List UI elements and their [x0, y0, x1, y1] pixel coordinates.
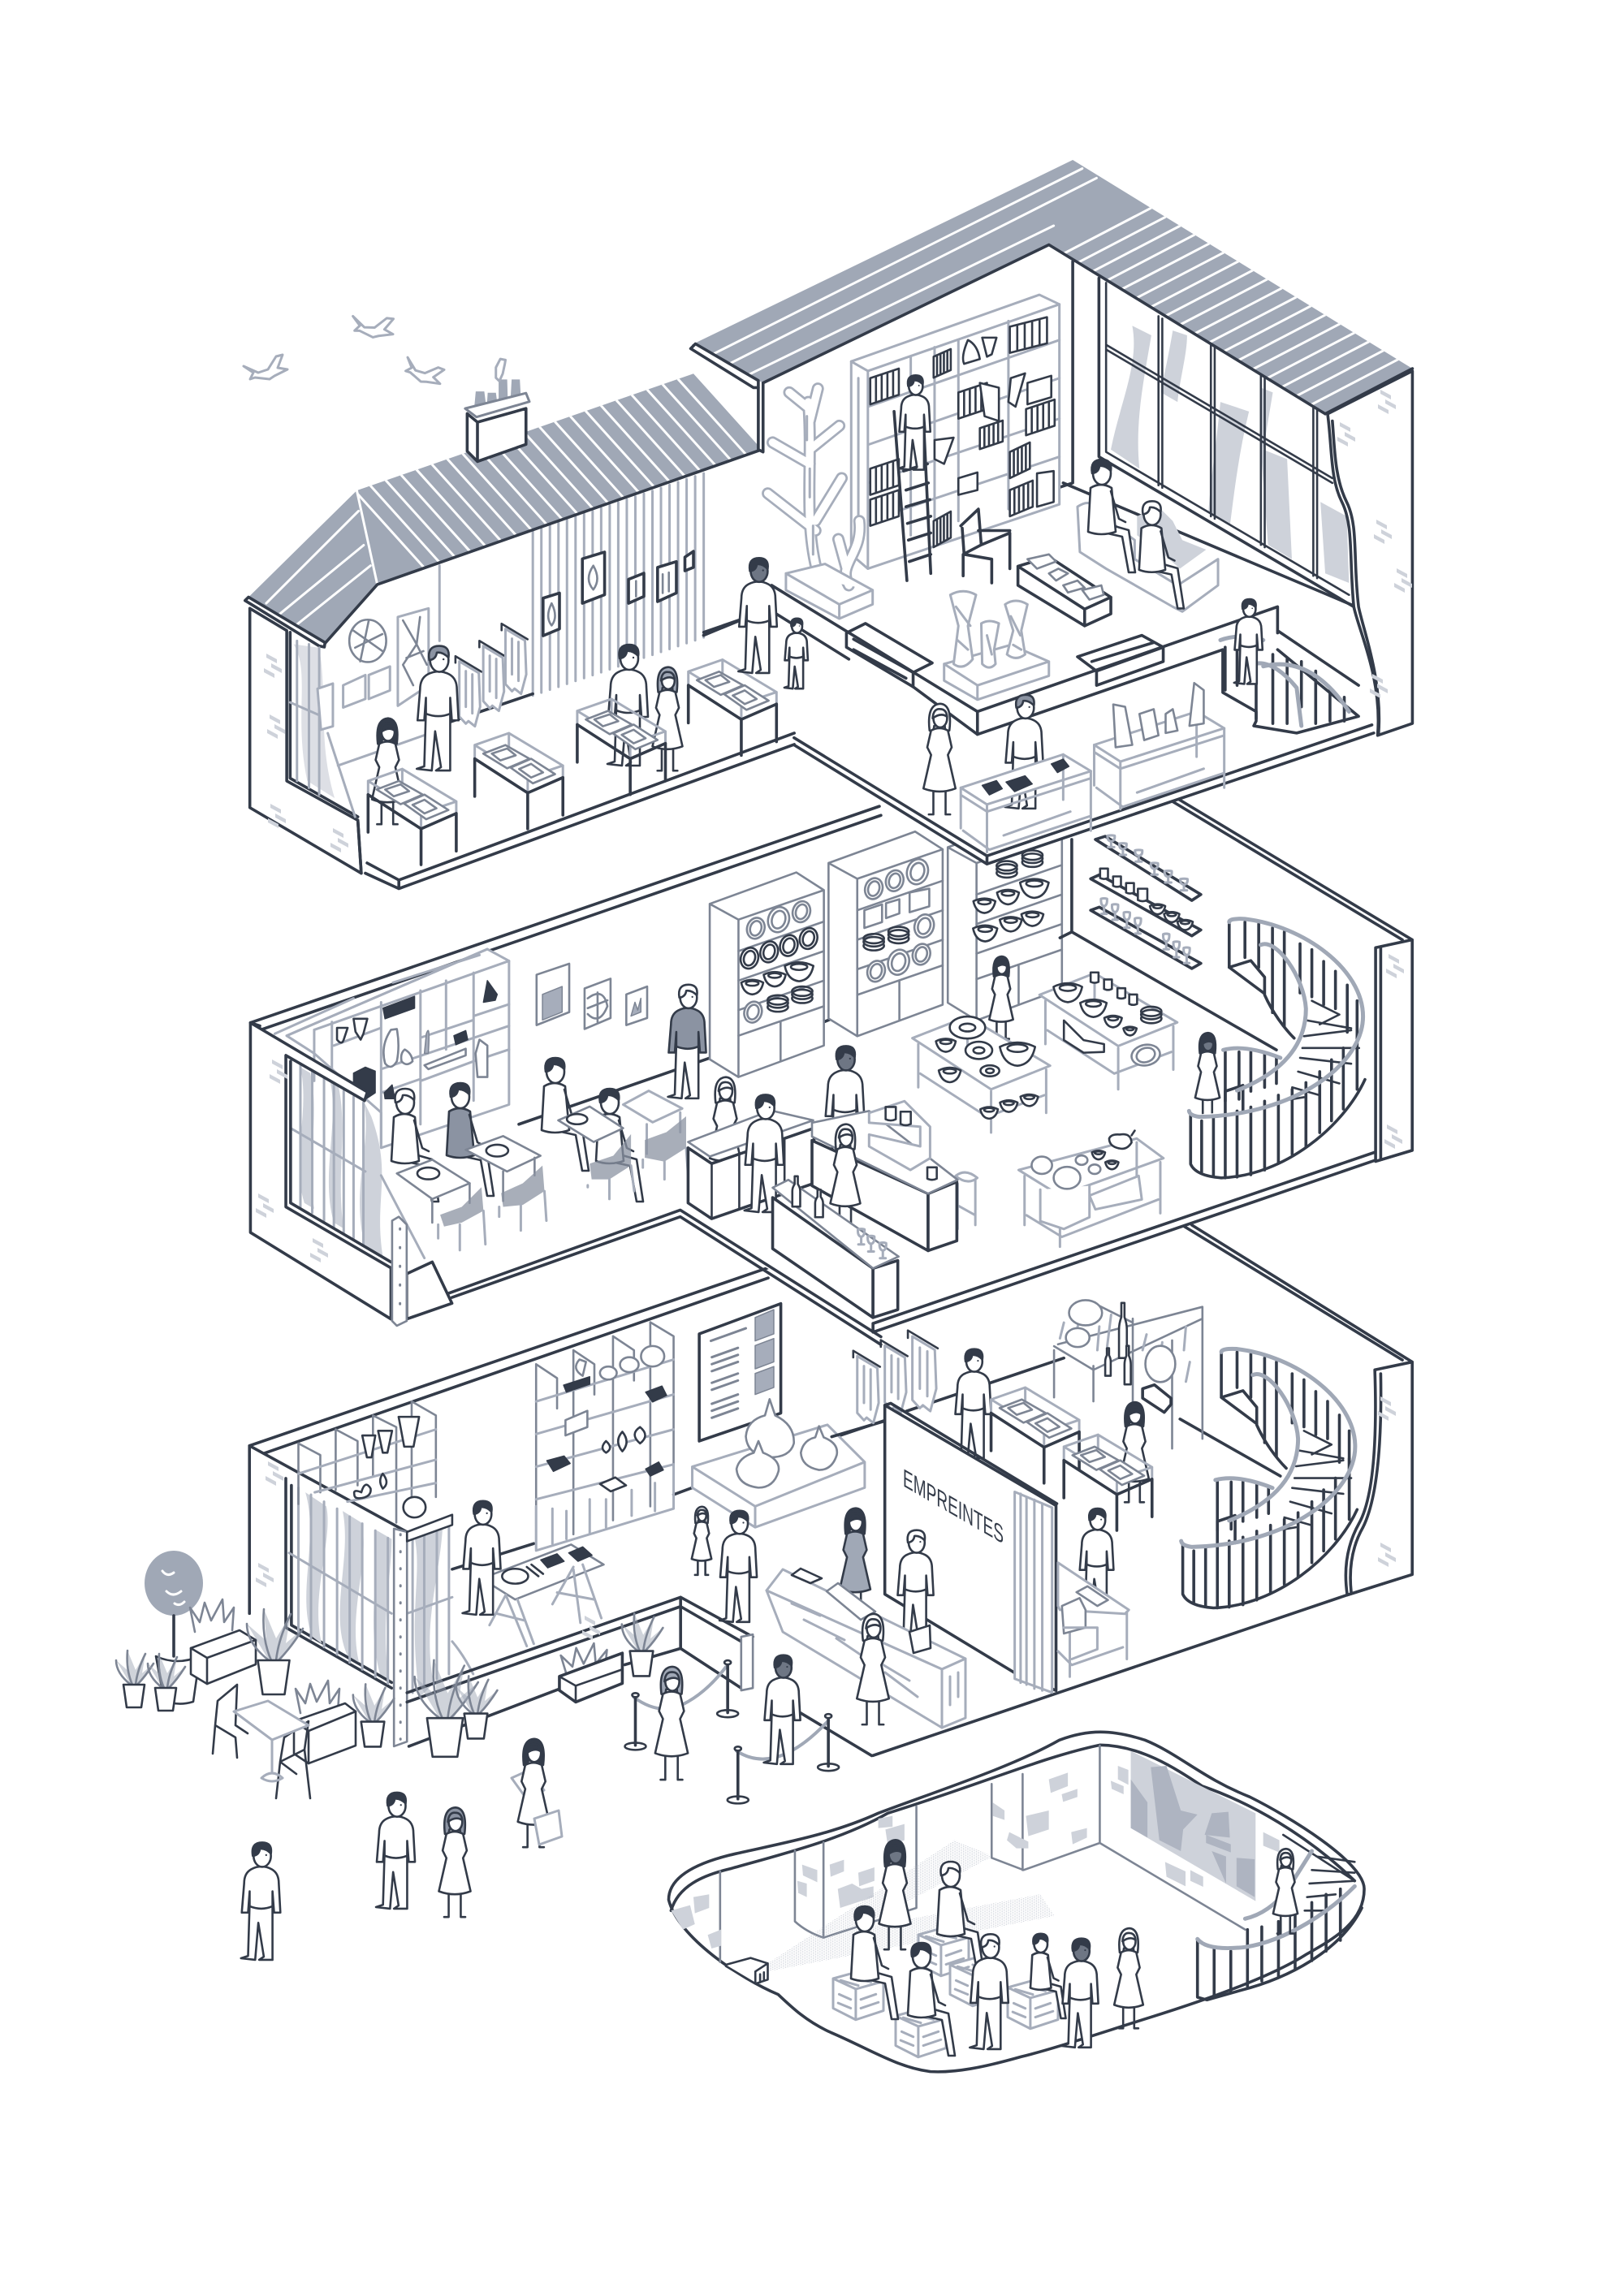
bird 3 — [400, 348, 448, 391]
console tables — [961, 683, 1224, 852]
stack — [767, 995, 788, 1012]
bowl — [741, 980, 763, 995]
pot plant large — [415, 1660, 478, 1757]
person: woman behind counter — [710, 1077, 741, 1183]
person: seated bearded man — [1088, 460, 1135, 572]
person: woman at till — [840, 1508, 870, 1614]
bricks — [1370, 674, 1388, 698]
rope barrier — [625, 1660, 839, 1803]
person: woman bending — [1120, 1402, 1149, 1502]
framed pictures — [543, 551, 693, 636]
spiral staircase — [1189, 919, 1365, 1178]
roof west — [246, 373, 762, 646]
planter 3 — [559, 1643, 622, 1702]
information poster — [699, 1304, 781, 1441]
ceramic tables — [913, 973, 1177, 1247]
person: queue woman grey hair — [655, 1667, 688, 1780]
pot plant — [353, 1684, 394, 1746]
person: salesman — [1005, 695, 1043, 809]
wooden display — [1054, 1300, 1203, 1448]
wire shelf left — [298, 1401, 436, 1522]
dining tables and chairs — [397, 1091, 688, 1250]
cafe shell — [250, 806, 881, 1344]
eave west — [245, 597, 325, 647]
panel: first floor cafe and ceramics — [250, 799, 1412, 1344]
plates — [777, 933, 801, 958]
person: shop assistant — [897, 1530, 934, 1639]
person: woman on stairs — [1273, 1849, 1298, 1934]
person: man on ladder — [899, 375, 931, 470]
floor edge east — [794, 725, 1374, 864]
person: woman with bag — [923, 704, 956, 814]
pot plant large — [247, 1609, 303, 1694]
bricks — [270, 1060, 287, 1084]
ground floor back shell — [249, 1267, 886, 1755]
terrace — [116, 1551, 839, 1803]
person: seated woman — [391, 1089, 438, 1202]
east wing library — [697, 261, 1358, 735]
bird 1 — [244, 355, 287, 379]
mid shell right — [873, 799, 1412, 1332]
art left — [317, 684, 333, 730]
low brick wall — [407, 1597, 753, 1746]
sculpture plinth — [944, 591, 1049, 700]
bricks — [1337, 422, 1355, 447]
person: seated boy — [1030, 1934, 1065, 2018]
pot plant — [148, 1654, 185, 1711]
towels — [456, 656, 482, 727]
cupboards right — [828, 816, 1062, 1036]
person: woman kneeling at table — [989, 956, 1013, 1039]
panel: ground floor shop — [116, 1225, 1412, 1960]
trestle table — [482, 1544, 603, 1599]
towels — [881, 1340, 908, 1413]
wall line — [1058, 261, 1356, 606]
person: woman on stairs — [1195, 1033, 1220, 1118]
person: woman grey hair walking — [438, 1807, 471, 1917]
bricks — [1394, 568, 1412, 593]
bricks — [1384, 1124, 1402, 1149]
person: bearded man — [1079, 1508, 1113, 1612]
floor plate first floor — [452, 1055, 1376, 1332]
plates — [758, 939, 780, 965]
person: seated woman — [937, 1862, 984, 1974]
plate — [741, 999, 765, 1025]
coffee table — [1018, 555, 1111, 626]
person: man walking — [719, 1511, 757, 1622]
person: seated woman long hair — [1139, 501, 1184, 608]
small art — [343, 667, 390, 707]
seating cube 3 — [918, 1927, 969, 1976]
tree sculpture — [768, 389, 873, 619]
shelves on wall — [1095, 836, 1201, 900]
bricks — [268, 804, 286, 828]
towels — [479, 641, 505, 711]
wall art — [537, 964, 569, 1025]
sales counter — [767, 1569, 965, 1728]
stair opening — [1220, 637, 1358, 733]
towels — [502, 624, 528, 694]
pot plant — [622, 1613, 663, 1676]
projected light beams — [764, 1841, 1055, 1971]
bricks — [330, 828, 348, 852]
bird 2 — [348, 305, 398, 343]
panel: top floor gallery — [245, 160, 1412, 888]
slatted curtain — [533, 473, 704, 696]
side display table — [1058, 1563, 1129, 1677]
bricks — [1378, 390, 1396, 414]
vase pedestal — [693, 1425, 865, 1527]
spiral stair in basement — [1198, 1835, 1362, 2000]
display case 1 — [368, 769, 456, 865]
front bar — [773, 1176, 899, 1318]
projector — [726, 1958, 768, 1983]
chair — [961, 509, 1010, 583]
person: seated man curly hair — [851, 1906, 898, 2019]
gable — [697, 352, 763, 452]
bricks — [1378, 1396, 1396, 1421]
sign: EMPREINTES: EMPREINTES — [903, 1464, 1004, 1550]
stack — [792, 986, 813, 1003]
wall shelving — [287, 949, 509, 1148]
seating cube 4 — [950, 1957, 1000, 2006]
bookcase — [851, 295, 1060, 568]
eave — [407, 1515, 452, 1541]
plates — [738, 945, 761, 971]
display case 3 — [577, 699, 665, 795]
spiral stair ground — [1181, 1349, 1357, 1608]
east gable wall with torn edge — [1328, 371, 1412, 736]
person: curly man at counter — [745, 1094, 784, 1212]
person: woman dark hair — [596, 1089, 643, 1202]
ladder — [894, 402, 931, 580]
person: woman with handbag — [1114, 1928, 1143, 2028]
coffee bar — [688, 1101, 978, 1250]
floor edge west — [358, 733, 794, 888]
person: curly man at table — [463, 1501, 501, 1615]
cracked panel art — [398, 608, 429, 706]
seating cube 1 — [833, 1971, 883, 2020]
person: man talking — [376, 1793, 415, 1909]
person: waiter with apron — [668, 985, 706, 1098]
pot plant — [456, 1676, 497, 1738]
bricks — [1386, 954, 1404, 978]
bricks — [256, 1563, 274, 1587]
chimney — [465, 359, 529, 461]
bowl — [763, 972, 786, 986]
person: man from back — [417, 646, 459, 770]
birds — [244, 305, 448, 391]
platform steps — [846, 624, 932, 687]
person: man on stairs — [1234, 599, 1263, 684]
person: girl waving — [692, 1507, 711, 1575]
platform steps right — [1078, 636, 1164, 685]
west gable wall — [250, 608, 361, 874]
person: queue man — [764, 1655, 801, 1764]
person: woman customer — [857, 1614, 889, 1724]
person: attendant — [607, 645, 648, 766]
person: child arms raised — [784, 619, 808, 688]
floor plate — [374, 714, 1378, 888]
person: woman with shopping bags — [512, 1739, 562, 1847]
person: standing woman — [879, 1840, 911, 1949]
person: man with child — [738, 558, 777, 673]
seating cube 5 — [1008, 1980, 1058, 2029]
person: man in suit — [447, 1083, 494, 1196]
bricks — [582, 1616, 600, 1640]
curtain west — [294, 645, 335, 798]
bricks — [256, 1193, 274, 1218]
cupboard — [710, 873, 824, 1077]
person: man at table — [542, 1058, 589, 1171]
bricks — [267, 714, 285, 739]
tree — [145, 1551, 203, 1704]
curtain — [300, 1067, 383, 1258]
wire shelf centre — [536, 1323, 674, 1548]
person: barista — [831, 1124, 860, 1228]
display case rear — [991, 1388, 1079, 1483]
bowl — [784, 962, 814, 982]
pot plants — [116, 1651, 153, 1707]
panel: basement cinema — [668, 1732, 1364, 2072]
person: man walking left — [241, 1842, 280, 1960]
person: man seen from back — [1062, 1939, 1099, 2048]
person: grey-haired woman — [653, 667, 682, 770]
rose window art — [349, 619, 387, 662]
partition wall — [885, 1403, 1056, 1693]
platform edges — [703, 585, 1358, 735]
west wing — [245, 359, 794, 888]
person: blond man — [970, 1934, 1009, 2049]
display case 2 — [475, 733, 563, 829]
column with rivets — [394, 1529, 407, 1746]
plates — [790, 899, 813, 925]
bricks — [266, 1461, 283, 1486]
person: man in long coat — [955, 1349, 991, 1458]
plates — [797, 926, 820, 952]
person: man behind bar — [825, 1046, 864, 1163]
café table and chairs — [213, 1685, 310, 1798]
sofa — [1078, 503, 1218, 611]
bricks — [310, 1238, 328, 1262]
bricks — [1378, 1543, 1396, 1567]
planter 2 — [294, 1681, 356, 1763]
display case 4 — [689, 659, 776, 755]
bricks — [1374, 520, 1392, 544]
plates — [745, 916, 767, 941]
display case rear 2 — [1064, 1435, 1152, 1530]
towels — [908, 1331, 938, 1411]
seating cube 2 — [896, 2009, 946, 2057]
plates — [765, 904, 793, 935]
bricks — [264, 654, 282, 678]
person: woman bending — [372, 719, 403, 824]
planter 1 — [190, 1599, 256, 1684]
towels — [853, 1351, 880, 1423]
left wall — [250, 1023, 391, 1319]
roof east — [691, 160, 1412, 864]
window — [1099, 278, 1354, 606]
cave cut-out outline — [668, 1732, 1364, 2072]
partition and rear room — [831, 1225, 1412, 1755]
person: seated dark hair — [908, 1943, 955, 2056]
